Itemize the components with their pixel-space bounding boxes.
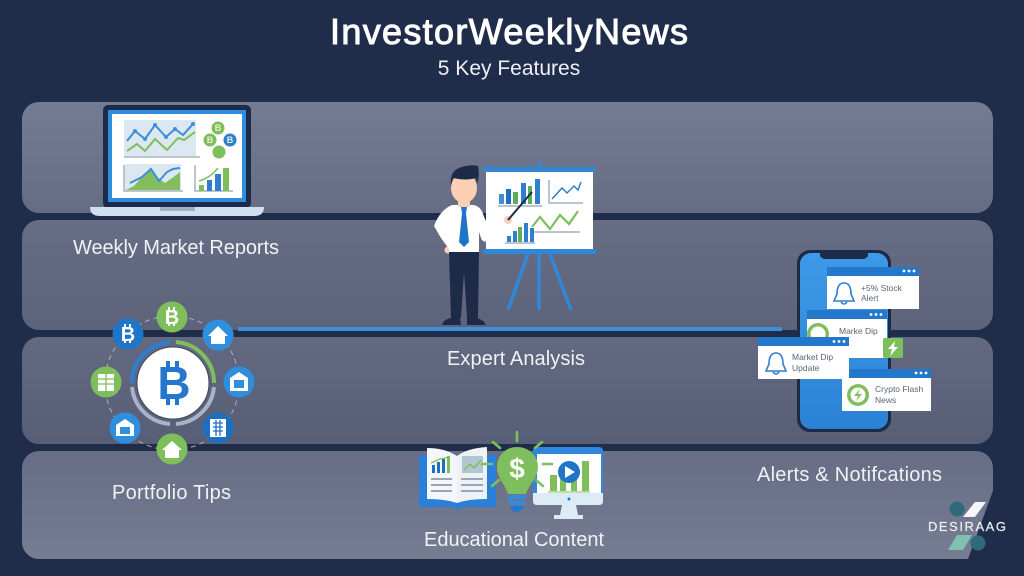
icon: presenter with chart board (434, 161, 596, 325)
logo: DESIRAAG (928, 488, 1006, 559)
label: portfolio tips: Portfolio Tips (112, 482, 231, 504)
card: stock alert: Alert (861, 293, 879, 303)
label: alerts and notifications: Alerts & Notifcations (757, 464, 942, 486)
title: InvestorWeeklyNews (330, 11, 688, 52)
panel: portfolio tips band (22, 337, 993, 444)
logo: DESIRAAG: DESIRAAG (928, 519, 1006, 534)
card: market dip update (758, 337, 849, 379)
central coin: B (157, 357, 191, 409)
icon: phone with alert cards (758, 250, 931, 432)
card: market dip: Marke Dip (839, 326, 878, 336)
subtitle: 5 Key Features (438, 57, 580, 80)
board (508, 254, 571, 310)
icon: laptop with market charts: B (215, 123, 222, 133)
light bulb (482, 432, 552, 512)
connector line (238, 327, 782, 331)
satellite icons (90, 302, 254, 464)
card: stock alert (827, 267, 919, 309)
panel: expert analysis band (22, 220, 993, 330)
icon: laptop with market charts: B (227, 135, 234, 145)
label: weekly market reports: Weekly Market Reports (73, 237, 279, 259)
card: crypto flash news (842, 369, 931, 411)
open book (419, 447, 496, 510)
icon: crypto portfolio wheel (90, 302, 254, 464)
card: market dip update: Update (792, 363, 820, 373)
central coin (132, 342, 214, 424)
presenter (444, 246, 452, 254)
monitor (533, 447, 603, 519)
card: crypto flash news: Crypto Flash (875, 384, 923, 394)
icon: laptop with market charts (90, 105, 264, 216)
icon: lightning badge (883, 338, 903, 358)
card: crypto flash news: News (875, 395, 896, 405)
panel: educational content band (22, 451, 993, 559)
card: market dip (807, 310, 887, 358)
icon: book, light bulb and video monitor (419, 432, 603, 519)
icon: laptop with market charts: B (207, 135, 214, 145)
light bulb: $ (509, 453, 525, 484)
card: market dip update: Market Dip (792, 352, 833, 362)
panel: weekly market reports band (22, 102, 993, 213)
satellite icons: B (121, 324, 135, 346)
satellite icons: B (165, 307, 179, 329)
label: expert analysis: Expert Analysis (447, 348, 585, 370)
label: educational content: Educational Content (424, 529, 604, 551)
card: stock alert: +5% Stock (861, 283, 903, 293)
